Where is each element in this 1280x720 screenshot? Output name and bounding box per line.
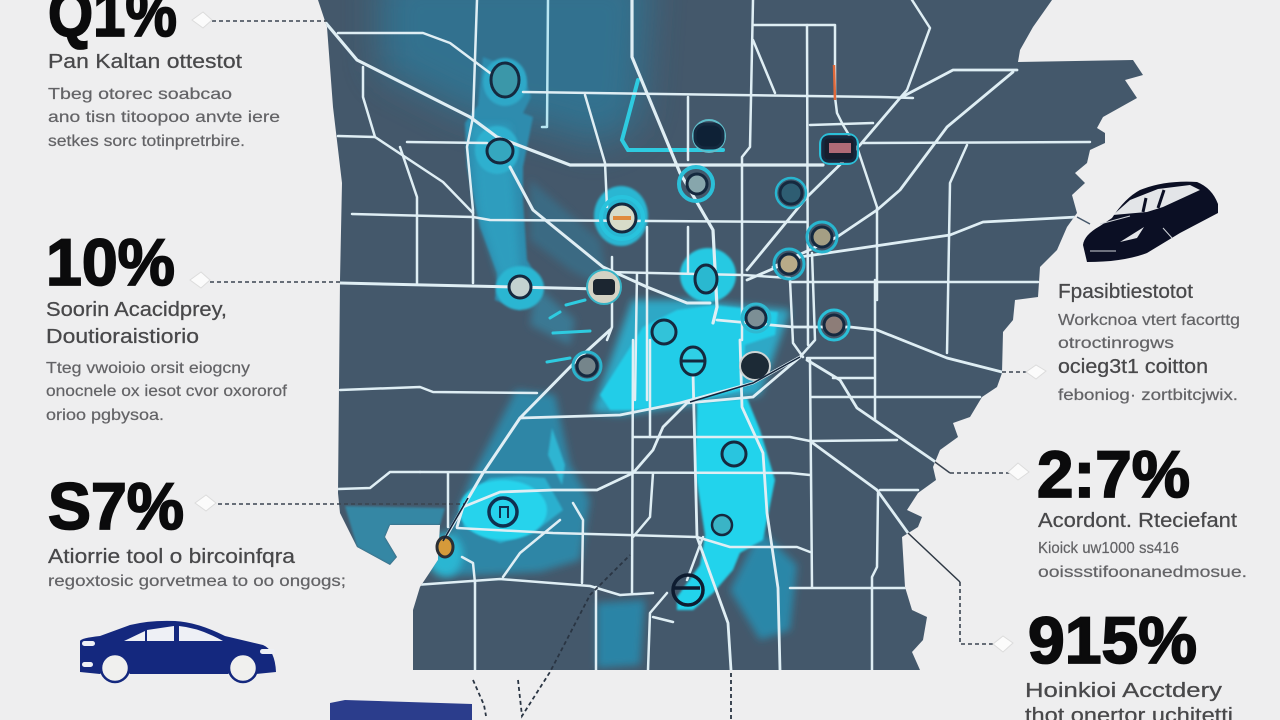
value: S7% xyxy=(48,469,184,543)
description: Kioick uw1000 ss416 xyxy=(1038,540,1179,557)
connector: 915% xyxy=(908,533,1013,652)
stat: Q1%: ano tisn titoopoo anvte iere xyxy=(48,109,280,126)
stat: 10%: orioo pgbysoa. xyxy=(46,407,164,424)
stat: 2:7%: ooissstifoonanedmosue. xyxy=(1038,564,1247,581)
stat: 2:7% xyxy=(1037,437,1247,581)
value: 915% xyxy=(1028,603,1197,677)
label: Atiorrie tool o bircoinfqra xyxy=(48,546,296,568)
label: Pan Kaltan ottestot xyxy=(48,51,242,73)
icon: blue car xyxy=(80,621,276,682)
orange highlight road xyxy=(834,65,835,100)
bottom leader lines xyxy=(473,555,731,720)
label: Acordont. Rteciefant xyxy=(1038,510,1237,532)
stat: 915% xyxy=(1025,603,1233,720)
description: Tteg vwoioio orsit eiogcny xyxy=(46,360,250,377)
icon: black car xyxy=(1083,182,1218,262)
stat: right text block: feboniog· zortbitcjwix. xyxy=(1058,387,1238,404)
label: Hoinkioi Acctdery xyxy=(1025,680,1222,702)
connector: 10% xyxy=(190,272,340,288)
map of road network xyxy=(318,0,1143,670)
map landmass xyxy=(318,0,1143,670)
stat: right text block xyxy=(1058,281,1240,404)
connector: Q1% xyxy=(192,12,327,28)
stat: S7% xyxy=(48,469,346,590)
road stub to black car xyxy=(1077,217,1090,224)
connector: 2:7% xyxy=(935,462,1029,480)
dark highway stroke xyxy=(690,357,800,402)
value: 2:7% xyxy=(1037,437,1190,511)
accident density glow xyxy=(345,0,797,668)
road network xyxy=(325,0,1090,670)
connector: right text block xyxy=(1002,365,1046,379)
connector: S7% xyxy=(195,495,468,541)
stat: 10%: onocnele ox iesot cvor oxororof xyxy=(46,383,288,400)
stat: right text block: ocieg3t1 coitton xyxy=(1058,356,1208,378)
value: 10% xyxy=(46,225,175,299)
label: Soorin Acacidprey, xyxy=(46,299,227,321)
stat: right text block: otroctinrogws xyxy=(1058,335,1174,352)
stat: Q1% xyxy=(48,0,280,150)
stat: Q1%: setkes sorc totinpretrbire. xyxy=(48,133,245,150)
accident hotspot markers xyxy=(437,63,858,605)
label: Fpasibtiestotot xyxy=(1058,281,1193,303)
stat: 10%: Doutioraistiorio xyxy=(46,326,199,348)
stat: 10% xyxy=(46,225,288,424)
blue bar fragment xyxy=(330,700,472,720)
description: Workcnoa vtert facorttg xyxy=(1058,312,1240,329)
description: Tbeg otorec soabcao xyxy=(48,86,232,103)
description: regoxtosic gorvetmea to oo ongogs; xyxy=(48,573,346,590)
